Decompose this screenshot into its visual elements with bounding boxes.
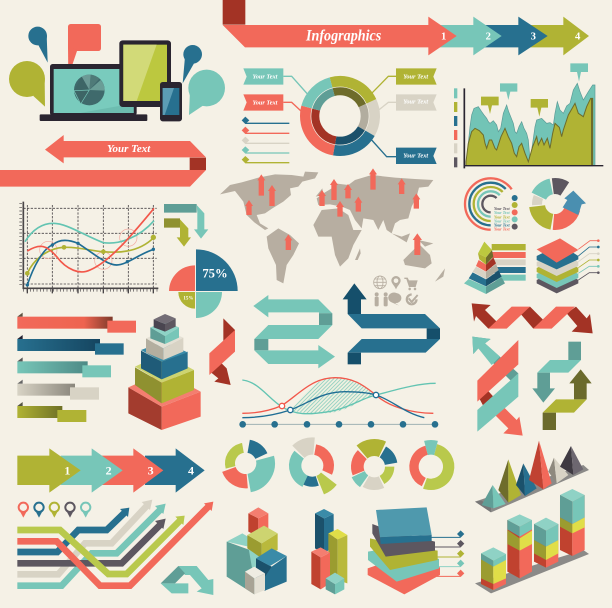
ribbon text: Your Text (107, 143, 151, 155)
small folded arrow (161, 566, 213, 595)
timeline (239, 421, 438, 428)
bar 3 (534, 518, 558, 568)
axes (21, 202, 158, 293)
arrow 1: 1 (64, 464, 70, 478)
arc labels: Your Text (494, 214, 511, 219)
flag labels: Your Text (253, 100, 278, 107)
arc labels: Your Text (494, 226, 511, 231)
arrow 3: 3 (148, 464, 154, 478)
bar 4 (560, 489, 585, 556)
flag labels: Your Text (403, 99, 428, 106)
bell curves (239, 378, 438, 428)
segmented wheel with arrow (531, 180, 586, 228)
stacked books with labels (368, 507, 464, 594)
arrow 1 with title: Infographics (305, 28, 381, 45)
concentric arcs chart (465, 178, 518, 231)
twisted ribbons (472, 337, 523, 436)
olive area (466, 98, 593, 166)
icon: cart (404, 278, 418, 290)
continents (220, 172, 445, 283)
arrow 3 (102, 448, 163, 493)
donut rings (293, 69, 387, 163)
arrow 4: 4 (188, 464, 194, 478)
flag labels: Your Text (403, 73, 428, 80)
teal S ribbon arrow (253, 295, 335, 368)
curves (25, 208, 154, 285)
stacked layers (537, 238, 600, 293)
arc labels: Your Text (494, 210, 511, 215)
arrow 1 with title (223, 0, 457, 55)
donut chart with flags (242, 68, 437, 164)
bar 2 (507, 514, 532, 578)
arrow 3: 3 (531, 32, 536, 43)
donut 4 (407, 443, 455, 490)
quarter pie 75% (169, 249, 238, 318)
donut 2 (283, 436, 342, 495)
red zigzag arrow (209, 318, 235, 385)
ribbon bars (17, 313, 136, 422)
platform (475, 550, 589, 593)
arrow 4 (145, 448, 205, 493)
world map (220, 168, 445, 283)
arrow 2: 2 (486, 32, 491, 43)
bars (492, 244, 526, 281)
arc labels: Your Text (494, 206, 511, 211)
platform (475, 465, 589, 512)
donut 1 (221, 439, 270, 488)
quarter pie 75%: 15% (183, 296, 193, 301)
arc dots (512, 195, 518, 230)
chart: laptop pie (74, 75, 105, 105)
hatched area (290, 378, 376, 414)
folded arrows small (164, 204, 208, 247)
3D bars group (311, 509, 347, 594)
stepped 3D pyramid (128, 314, 201, 430)
teal area (466, 83, 595, 166)
arc labels: Your Text (494, 222, 511, 227)
pyramid with bars (464, 242, 526, 294)
curves (242, 378, 436, 418)
callouts (481, 63, 588, 117)
icon: coral speech bubble (68, 24, 101, 77)
small icon set (374, 276, 418, 306)
grid (23, 205, 157, 288)
icon: teal bubble right (188, 70, 225, 115)
highlight circles (40, 229, 137, 269)
arc labels: Your Text (494, 218, 511, 223)
leader lines (428, 534, 461, 576)
icon: check (406, 293, 418, 305)
growth arrows (245, 168, 422, 255)
wheel arrow (563, 191, 586, 215)
axes (464, 88, 603, 168)
icon: people (375, 292, 388, 306)
arrow 2 (440, 17, 502, 55)
icon: phone (160, 82, 182, 121)
crossing stripe arrows (17, 500, 213, 586)
map pins (19, 503, 90, 517)
3D stacked bar chart (475, 489, 589, 593)
arrow 4 (528, 17, 589, 55)
flag labels (243, 68, 437, 164)
banner: numbered arrows (223, 0, 589, 55)
area chart (454, 63, 603, 168)
blue S ribbon arrow (343, 283, 440, 364)
3D blocks group (227, 507, 287, 594)
bar 1 (481, 547, 506, 590)
flag labels: Your Text (253, 73, 278, 80)
four small donuts (221, 436, 455, 495)
icon: laptop (40, 64, 147, 121)
legend bullets (242, 117, 289, 163)
3D cone chart (475, 441, 589, 512)
ribbon arrow: Your Text (0, 135, 206, 187)
quarter pie 75%: 75% (202, 267, 228, 281)
layers (537, 238, 578, 293)
curve points (25, 235, 156, 287)
red zigzag ribbon (472, 303, 593, 333)
icon: pin (391, 276, 401, 289)
line chart (21, 202, 158, 293)
books (368, 507, 440, 594)
pyramid tiers (464, 242, 505, 294)
panel: devices with speech bubbles (9, 24, 225, 121)
icon: tablet (119, 40, 171, 107)
numbered arrows bottom (17, 448, 205, 493)
folded arrows (532, 342, 592, 430)
arrow 2: 2 (106, 464, 112, 478)
icon: globe (374, 276, 386, 289)
icon: chat bubble (388, 293, 401, 306)
arrow 2 (61, 448, 123, 493)
leader lines (578, 239, 600, 280)
arrow 1 with title: 1 (441, 32, 446, 43)
cones (482, 441, 583, 508)
intersections (279, 392, 379, 413)
icon: olive speech bubble (9, 61, 45, 107)
leader diamonds (457, 530, 464, 577)
chart legend (454, 88, 457, 167)
flag labels: Your Text (403, 153, 428, 160)
arrow 4: 4 (575, 32, 581, 43)
arrow 3 (485, 17, 548, 55)
arc labels (494, 206, 511, 231)
arrow 1 (17, 448, 81, 493)
icon: blue speech bubble (28, 27, 48, 63)
icon: blue bubble right (183, 45, 202, 83)
donut 3 (347, 440, 401, 494)
